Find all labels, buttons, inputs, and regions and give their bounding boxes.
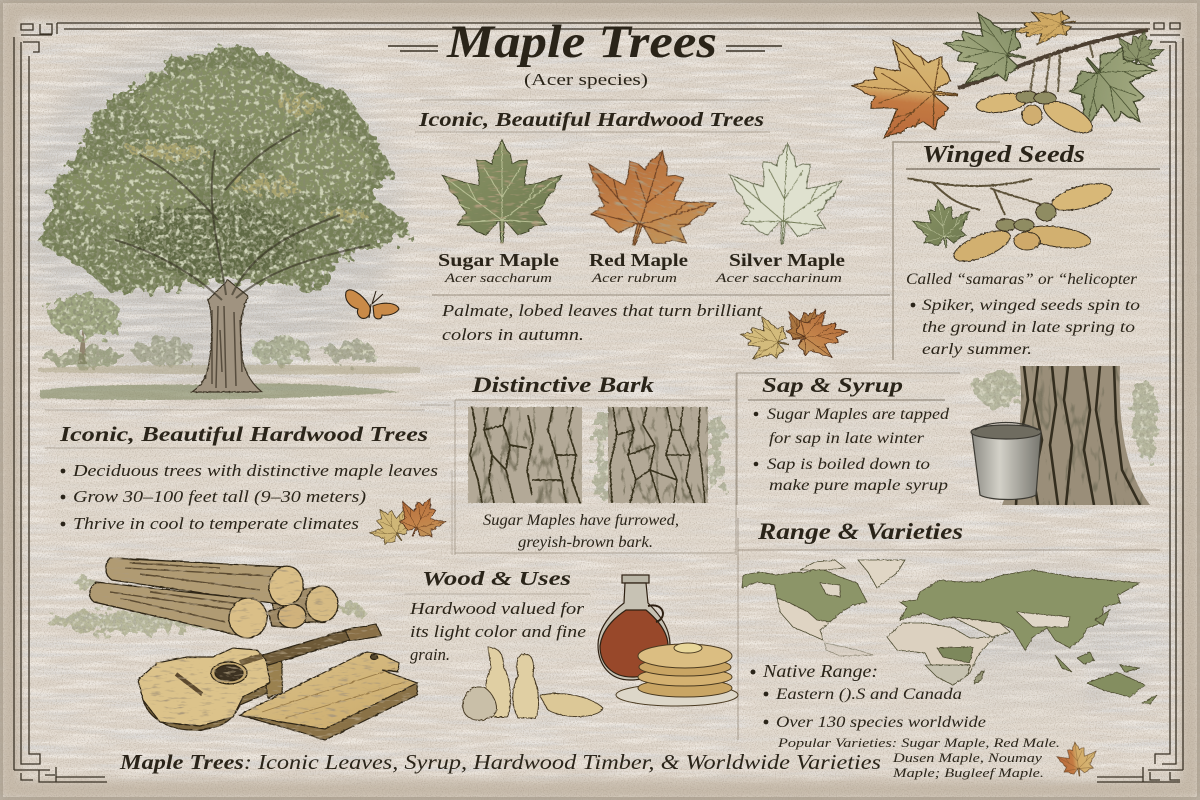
branches — [115, 130, 370, 300]
corner: top left — [21, 23, 57, 52]
samara illustration — [907, 178, 1115, 267]
subtitle: (Acer species) — [524, 70, 648, 89]
bullets: Grow 30–100 feet tall (9–30 meters) — [73, 487, 366, 506]
bullets: Sap is boiled down to — [767, 456, 930, 473]
text: Called “samaras” or “helicopter — [906, 271, 1138, 288]
corner: bottom right — [1097, 767, 1183, 782]
heading: Iconic, Beautiful Hardwood Trees — [59, 422, 428, 446]
bark texture left — [468, 407, 582, 503]
icon: autumn leaves — [736, 300, 851, 366]
heading: Distinctive Bark — [471, 372, 654, 397]
background small tree — [49, 294, 121, 364]
illustration: top branch — [847, 5, 1175, 151]
large autumn leaf — [847, 36, 962, 144]
popular varieties: Dusen Maple, Noumay — [892, 750, 1042, 765]
heading: Winged Seeds — [922, 142, 1085, 168]
lighter text panels — [45, 145, 1160, 775]
samara cluster — [975, 90, 1097, 139]
popular varieties: Popular Varieties: Sugar Maple, Red Male. — [777, 735, 1060, 750]
panel: left facts — [45, 405, 452, 555]
heading: Range & Varieties — [757, 519, 963, 544]
text: wood and uses: Hardwood valued for — [409, 599, 585, 618]
icon: leaf pair — [362, 488, 452, 553]
bullets: make pure maple syrup — [769, 477, 948, 494]
text: early summer. — [922, 341, 1032, 358]
bark texture right — [608, 407, 708, 503]
panel: sap and syrup — [737, 366, 1158, 506]
title: Maple Trees — [446, 16, 717, 68]
popular varieties: Maple; Bugleef Maple. — [892, 765, 1044, 780]
heading: Sap & Syrup — [762, 373, 903, 397]
text: wood and uses — [405, 568, 590, 664]
bottom log — [90, 582, 250, 637]
footer caption: Maple Trees : Iconic Leaves, Syrup, Hardwood Timber, & Worldwide Varieties — [119, 750, 881, 774]
bullets: Sugar Maples are tapped — [767, 406, 949, 423]
silver maple label — [715, 250, 845, 285]
world map — [742, 560, 1157, 704]
panel: winged seeds — [893, 142, 1160, 360]
heading: iconic center — [415, 100, 770, 132]
bullets: Thrive in cool to temperate climates — [73, 514, 359, 533]
caption — [483, 512, 679, 551]
icon: small maple leaf — [1055, 739, 1099, 779]
sugar maple label: Sugar Maple — [438, 250, 559, 270]
illustration: pancakes — [616, 643, 738, 706]
text: palmate leaves: colors in autumn. — [442, 325, 584, 344]
grass under logs — [47, 579, 364, 633]
ground — [38, 365, 420, 400]
tan leaf — [1010, 5, 1078, 48]
range bullets: Native Range: — [762, 661, 878, 681]
bullets: for sap in late winter — [769, 430, 925, 447]
range bullets: Over 130 species worldwide — [776, 714, 986, 731]
small logs — [270, 587, 322, 622]
silver maple label: Silver Maple — [729, 250, 845, 270]
caption: greyish-brown bark. — [518, 534, 653, 551]
illustration: syrup jug — [598, 575, 670, 680]
title — [388, 16, 782, 68]
bullets — [754, 406, 949, 494]
sugar maple label: Acer saccharum — [444, 270, 552, 285]
top log — [106, 558, 286, 605]
text: palmate leaves: Palmate, lobed leaves that turn brilliant — [441, 301, 763, 320]
illustration: guitar — [138, 624, 382, 730]
bullets — [61, 461, 438, 533]
panel: distinctive bark — [455, 372, 736, 555]
sugar maple leaf — [442, 140, 562, 243]
text: wood and uses: its light color and fine — [410, 622, 586, 641]
text: wood and uses: Wood & Uses — [422, 568, 571, 590]
illustration: maple tree — [38, 46, 420, 400]
text: Spiker, winged seeds spin to — [922, 297, 1140, 314]
canopy — [40, 46, 409, 292]
panel: leaf species — [432, 131, 890, 295]
text: wood and uses: grain. — [410, 645, 450, 664]
corner: top right — [1150, 23, 1180, 42]
small green leaf — [1112, 25, 1167, 74]
bullets: Deciduous trees with distinctive maple leaves — [72, 461, 438, 480]
silver maple label: Acer saccharinum — [715, 270, 842, 285]
illustration: logs — [47, 558, 364, 641]
icon: butterfly — [346, 290, 399, 319]
range bullets: Eastern ().S and Canada — [775, 686, 962, 703]
heading: iconic center: Iconic, Beautiful Hardwood Trees — [418, 109, 764, 131]
icon: metal bucket — [971, 422, 1041, 500]
popular varieties — [777, 735, 1060, 780]
illustration: turned wood bowls and gourds — [463, 647, 603, 720]
panel: range and varieties — [738, 518, 1160, 780]
caption: Sugar Maples have furrowed, — [483, 512, 679, 529]
range bullets — [750, 661, 986, 731]
corner: bottom left — [14, 767, 107, 782]
red maple leaf — [570, 131, 726, 265]
illustration: cutting board — [239, 652, 417, 740]
text: the ground in late spring to — [922, 319, 1135, 336]
silver maple leaf — [726, 140, 844, 247]
text — [906, 271, 1140, 358]
text: palmate leaves — [441, 301, 763, 344]
sugar maple label — [438, 250, 559, 285]
background bushes — [43, 336, 375, 367]
red maple label — [589, 250, 688, 285]
red maple label: Red Maple — [589, 250, 688, 270]
green leaf — [938, 8, 1032, 92]
foliage behind bark — [596, 412, 722, 497]
trunk with bucket — [971, 366, 1158, 506]
red maple label: Acer rubrum — [591, 270, 677, 285]
right green leaf — [1052, 29, 1175, 151]
trunk — [192, 280, 262, 392]
